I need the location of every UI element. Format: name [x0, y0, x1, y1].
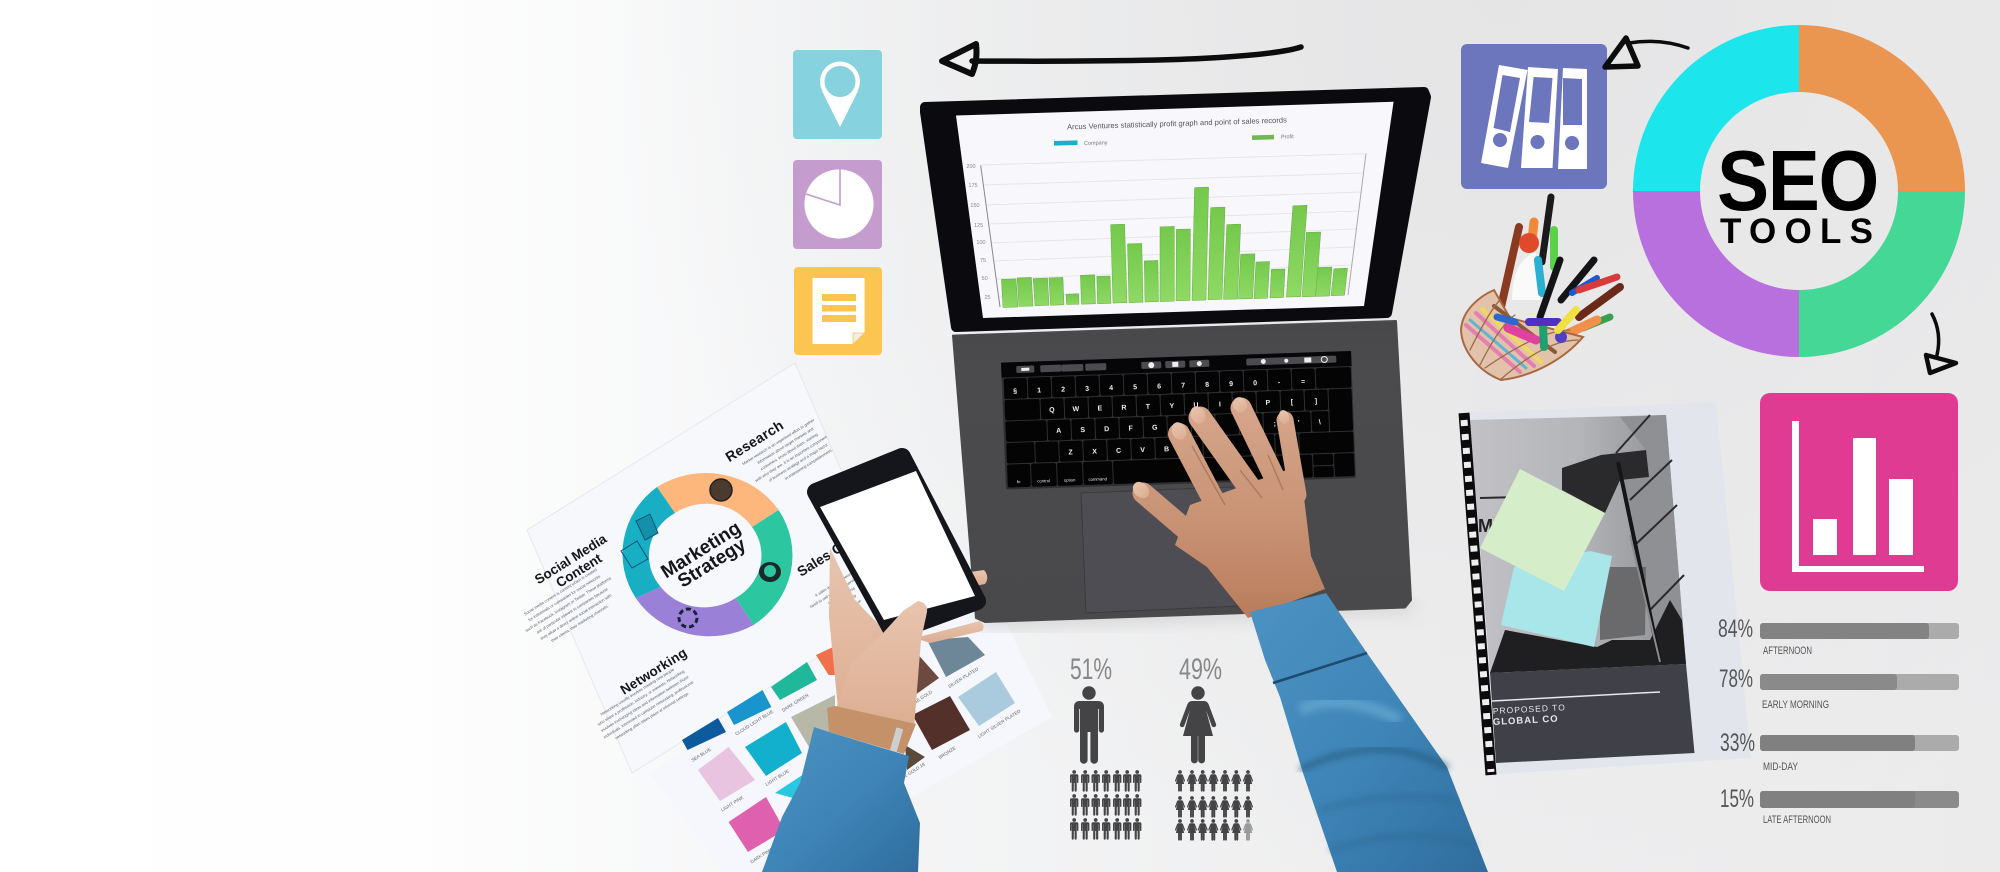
men pictogram grid	[1070, 770, 1141, 840]
document: colour swatch sheet: LIGHT PINK	[720, 794, 745, 813]
keyboard: U	[1193, 402, 1199, 409]
keyboard: 2	[1061, 387, 1065, 394]
text block: research: information about target markets and	[756, 426, 814, 465]
text block: research: with who they are. It is an important component	[754, 434, 829, 483]
keyboard: E	[1097, 405, 1103, 412]
laptop	[925, 92, 1426, 630]
heading: sales: Sales Calls	[794, 527, 865, 580]
document: colour swatch sheet: DARK GREEN	[781, 693, 809, 713]
icon: binders tile	[1461, 44, 1607, 189]
notebook text	[1493, 702, 1566, 728]
pen basket	[1461, 197, 1620, 380]
arrow: long hand-drawn pointing left	[942, 44, 1301, 74]
SEO tools donut	[1633, 25, 1965, 357]
keyboard: -	[1278, 379, 1281, 386]
basket wire body	[1461, 290, 1583, 380]
keyboard: V	[1140, 447, 1145, 454]
notebook cover photo: M	[1478, 516, 1493, 536]
heading: research: Research	[722, 417, 786, 465]
keyboard: option	[1064, 477, 1076, 483]
icon: bar chart tile	[1760, 393, 1958, 591]
text block: social media: Social media content is content which is created	[523, 567, 598, 616]
laptop base	[953, 321, 1411, 622]
screen chart: 100	[976, 240, 986, 246]
text block: networking: who share a profession, industry, or interests. Networking	[597, 669, 685, 727]
chart title: Arcus Ventures statistically profit graph and point of sales records	[1067, 116, 1287, 131]
text block: sales: for your business	[827, 585, 856, 606]
keyboard: 8	[1205, 382, 1209, 389]
text block: social media: are of particular interest to companies because	[535, 586, 609, 635]
keyboard: B	[1164, 446, 1169, 453]
notebook text: GLOBAL CO	[1493, 714, 1559, 728]
keyboard: T	[1146, 404, 1151, 411]
right sleeve: denim	[1250, 593, 1488, 872]
women pictogram grid	[1175, 770, 1253, 841]
document: colour swatch sheet: ROSE GOLD	[907, 689, 934, 708]
keyboard: C	[1116, 448, 1121, 455]
hand on trackpad	[1130, 395, 1325, 618]
text block: social media: their clients, their marketing channels.	[550, 603, 610, 643]
chart legend	[1054, 134, 1294, 147]
text block: networking: individuals. Interested in computer networking, professional	[603, 680, 694, 739]
text block: sales: hired to sell products or services	[809, 574, 860, 609]
keyboard: I	[1219, 401, 1221, 408]
text block: networking: Networking usually involves meeting new people	[599, 666, 676, 717]
phone hand fingers	[829, 548, 987, 726]
screen chart: 175	[968, 183, 978, 189]
document: marketing strategy sheet	[516, 363, 900, 773]
keyboard: \	[1319, 419, 1321, 426]
keyboard: [	[1291, 399, 1294, 406]
notebook text: PROPOSED TO	[1493, 702, 1566, 716]
text block: research: in maintaining competitiveness.	[784, 447, 834, 481]
progress bar: mid-day 33%: MID-DAY	[1763, 761, 1798, 773]
bars	[1001, 187, 1348, 308]
screen chart	[966, 116, 1366, 308]
progress bar: late afternoon 15%: 15%	[1720, 785, 1754, 813]
watch strap	[827, 706, 916, 754]
progress bar: late afternoon 15%: LATE AFTERNOON	[1763, 814, 1831, 826]
keyboard: 9	[1229, 381, 1233, 388]
keyboard: =	[1301, 379, 1305, 386]
text block: research: customers. know about them, starting	[760, 432, 819, 471]
heading: social media content: Social Media	[532, 531, 610, 587]
keyboard: fn	[1017, 479, 1021, 484]
donut title: SEO	[1717, 134, 1878, 229]
keyboard: 3	[1085, 386, 1089, 393]
keyboard: 0	[1253, 380, 1257, 387]
donut subtitle: TOOLS	[1720, 212, 1873, 251]
document: colour swatch sheet: DARK PINK	[749, 847, 774, 864]
thumb and palm	[835, 601, 927, 728]
document: colour swatch sheet: CLOUD LIGHT BLUE	[734, 709, 774, 737]
sticky note: green	[1480, 469, 1605, 591]
screen chart: 125	[974, 223, 983, 229]
chart legend: Profit	[1281, 134, 1294, 141]
keyboard: '	[1298, 420, 1300, 427]
left sleeve: denim	[762, 727, 920, 872]
keyboard: S	[1080, 427, 1086, 434]
progress bar: afternoon 84%: 84%	[1718, 615, 1753, 643]
screen chart: 50	[982, 276, 988, 282]
icon: document tile	[794, 267, 882, 355]
trackpad	[1081, 487, 1240, 613]
document: marketing strategy sheet: Strategy	[674, 534, 750, 592]
text block: social media: they allow a direct online social interaction with	[539, 593, 612, 641]
text block: sales: independently	[833, 593, 857, 610]
keyboard: 5	[1133, 384, 1137, 391]
keyboard: R	[1121, 405, 1127, 412]
keyboard: G	[1152, 425, 1158, 432]
keyboard: control	[1037, 478, 1050, 484]
arrow: to binders	[1605, 38, 1688, 67]
keyboard	[1001, 351, 1356, 490]
keyboard: command	[1088, 476, 1108, 482]
keyboard: 6	[1157, 383, 1161, 390]
heading: social media content: Content	[553, 550, 605, 590]
progress bar: afternoon 84%: AFTERNOON	[1763, 645, 1812, 657]
keyboard: Q	[1049, 407, 1055, 414]
keyboard: ;	[1273, 421, 1276, 428]
laptop screen	[956, 102, 1394, 318]
screen chart: 200	[966, 164, 976, 170]
document: colour swatch sheet: LIGHT SILVER PLATED	[977, 708, 1022, 739]
document: colour swatch sheet: SILVER PLATED	[947, 666, 980, 689]
progress bar: afternoon 84%	[1718, 615, 1959, 657]
document: colour swatch sheet: LIGHT BLUE	[765, 769, 790, 787]
donut chart: marketing strategy	[621, 473, 792, 636]
donut label: Marketing	[657, 518, 745, 583]
progress bar: early morning 78%: 78%	[1719, 665, 1753, 693]
screen chart: 150	[970, 203, 980, 209]
icon: pie chart tile	[793, 160, 882, 249]
touch bar	[1001, 351, 1352, 378]
keyboard: D	[1104, 426, 1109, 433]
laptop lid	[925, 92, 1426, 327]
keyboard: A	[1056, 428, 1061, 435]
notebook spiral binding	[1464, 413, 1491, 775]
text block: sales: A sales agent is a person	[814, 570, 854, 598]
text block: social media: such as Facebook, Instagram or Twitter. These platforms	[524, 576, 612, 633]
phone screen	[820, 471, 975, 620]
notebook	[1459, 402, 1751, 775]
text block: sales: the dollar value	[836, 598, 863, 617]
keyboard: §	[1013, 388, 1017, 395]
document: colour swatch sheet: BRONZE	[938, 746, 957, 760]
chart legend: Company	[1084, 140, 1108, 147]
keyboard: P	[1265, 400, 1271, 407]
text block: research: of business strategy and a major factor	[768, 442, 829, 483]
text block: social media: for individuals or companies for social networks	[527, 574, 601, 622]
screen chart: 25	[984, 295, 991, 301]
text block: networking: networking often takes place at informal settings.	[614, 690, 690, 741]
progress bar: mid-day 33%	[1720, 729, 1959, 773]
screen chart: 75	[980, 258, 986, 264]
keyboard: O	[1241, 401, 1247, 408]
icon: location pin tile	[793, 50, 882, 139]
keyboard: ]	[1315, 398, 1317, 405]
progress bar: early morning 78%: EARLY MORNING	[1762, 699, 1829, 711]
progress bar: mid-day 33%: 33%	[1720, 729, 1755, 757]
keyboard: 1	[1037, 387, 1041, 394]
document: colour swatch sheet: SEA BLUE	[690, 747, 712, 763]
icon: woman	[1180, 686, 1216, 763]
sticky note: cyan	[1501, 551, 1612, 647]
smartphone	[816, 457, 977, 632]
progress bar: late afternoon 15%	[1720, 785, 1959, 826]
men statistic	[1070, 653, 1141, 840]
men percentage: 51%	[1070, 653, 1112, 686]
women percentage: 49%	[1179, 653, 1222, 686]
keyboard: 4	[1109, 385, 1113, 392]
keyboard: W	[1072, 406, 1080, 413]
keyboard: F	[1128, 425, 1134, 432]
keyboard: X	[1092, 449, 1097, 456]
keyboard: 7	[1181, 383, 1185, 390]
keyboard: Y	[1169, 403, 1175, 410]
women statistic	[1175, 653, 1253, 841]
keyboard: Z	[1068, 449, 1074, 456]
document: colour swatch sheet: ROSE GOLD 18	[895, 761, 926, 784]
text block: research: Market research is an organised effort to gather	[741, 417, 816, 466]
icon: man	[1074, 686, 1104, 764]
notebook dark panel	[1490, 664, 1694, 763]
arrow: down to bar chart	[1926, 314, 1956, 373]
document: colour swatch sheet	[650, 590, 1052, 872]
progress bar: early morning 78%	[1719, 665, 1959, 711]
notebook cover photo	[1470, 415, 1686, 673]
heading: networking: Networking	[618, 645, 690, 698]
pen	[1618, 462, 1660, 662]
text block: networking: involves exchanging ideas and information between those	[600, 674, 690, 733]
